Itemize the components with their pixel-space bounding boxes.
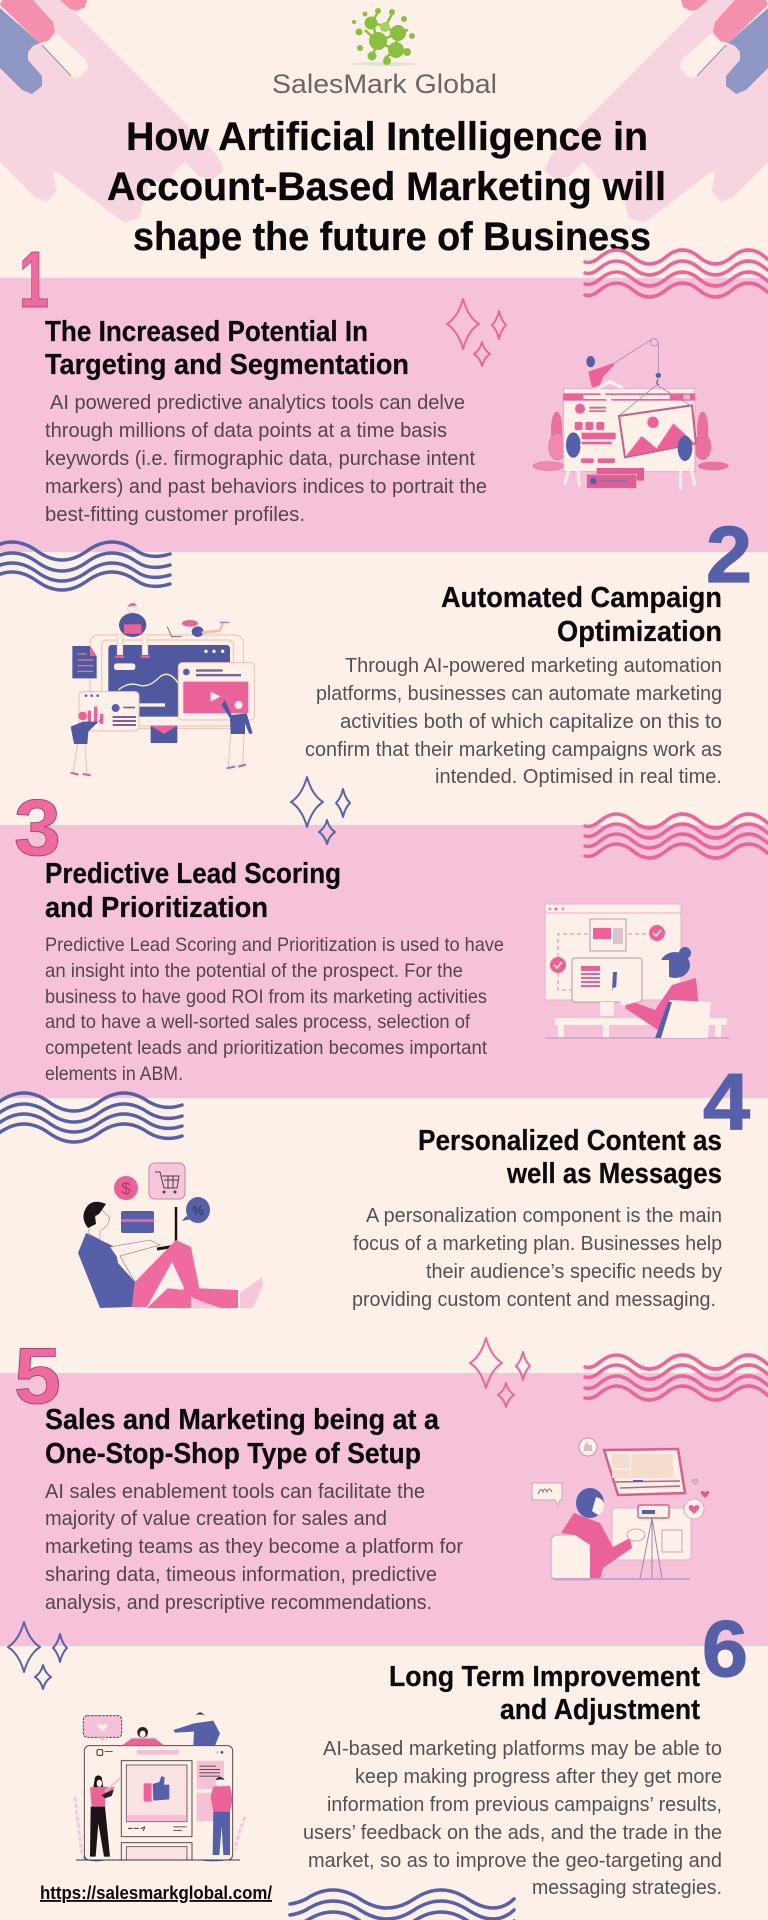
decorative corner stripes: top left bbox=[0, 0, 222, 221]
wave decoration blue bbox=[290, 1890, 514, 1920]
heading: well as Messages bbox=[506, 1158, 722, 1190]
heading: The Increased Potential In bbox=[45, 316, 368, 348]
body text: AI-based marketing platforms may be able to bbox=[323, 1737, 722, 1760]
body text: keep making progress after they get more bbox=[355, 1765, 722, 1788]
body text: their audience’s specific needs by bbox=[426, 1260, 723, 1283]
heading bbox=[441, 582, 722, 648]
panel: section 2 automated campaign optimization bbox=[0, 510, 752, 788]
wave decoration pink bbox=[585, 250, 768, 297]
heading bbox=[45, 858, 341, 924]
body text: intended. Optimised in real time. bbox=[435, 765, 722, 788]
body text: market, so as to improve the geo-targeting and bbox=[308, 1849, 722, 1872]
body text: sharing data, timeous information, predictive bbox=[45, 1563, 437, 1586]
panel: section 3 predictive lead scoring bbox=[0, 777, 768, 1098]
number 2: 2 bbox=[706, 510, 752, 599]
body text: information from previous campaigns’ results, bbox=[327, 1793, 722, 1816]
body text: majority of value creation for sales and bbox=[45, 1507, 387, 1530]
heading bbox=[45, 316, 409, 381]
body text bbox=[352, 1204, 723, 1311]
number 5: 5 bbox=[14, 1331, 61, 1420]
illustration: social media post with like and people bbox=[75, 1712, 245, 1861]
body text: AI sales enablement tools can facilitate the bbox=[45, 1480, 425, 1503]
illustration: people around dashboard screen bbox=[71, 603, 254, 775]
sparkle stars bbox=[470, 1338, 530, 1407]
panel: section 6 long term improvement bbox=[8, 1604, 748, 1920]
body text: business to have good ROI from its marketing activities bbox=[45, 986, 487, 1008]
heading bbox=[389, 1661, 700, 1726]
body text: an insight into the potential of the prospect. For the bbox=[45, 960, 463, 982]
illustration: woman at desk with workflow window bbox=[545, 904, 729, 1038]
heading: Targeting and Segmentation bbox=[45, 349, 409, 381]
body text: elements in ABM. bbox=[45, 1063, 183, 1085]
panel: section 5 sales and marketing setup bbox=[0, 1331, 768, 1646]
wave decoration blue bbox=[0, 542, 170, 590]
body text: keywords (i.e. firmographic data, purchase intent bbox=[45, 447, 475, 470]
heading: Long Term Improvement bbox=[389, 1661, 700, 1693]
body text: through millions of data points at a time basis bbox=[45, 419, 447, 442]
body text: platforms, businesses can automate marketing bbox=[316, 682, 722, 705]
illustration: man with laptop sitting, shopping icons: % bbox=[192, 1203, 204, 1218]
heading: Automated Campaign bbox=[441, 582, 722, 614]
sparkle stars bbox=[8, 1622, 67, 1689]
illustration: man with laptop sitting, shopping icons: $ bbox=[121, 1179, 131, 1198]
illustration: website with people fishing an image bbox=[533, 339, 729, 488]
body text: and to have a well-sorted sales process, selection of bbox=[45, 1011, 471, 1033]
body text bbox=[303, 1737, 722, 1899]
title: Account-Based Marketing will bbox=[107, 165, 666, 209]
body text: users’ feedback on the ads, and the trade in the bbox=[303, 1821, 722, 1844]
wave decoration blue bbox=[0, 1093, 182, 1142]
heading: Personalized Content as bbox=[418, 1125, 722, 1157]
title bbox=[107, 115, 666, 259]
number 3: 3 bbox=[14, 783, 61, 872]
body text bbox=[45, 934, 504, 1085]
body text bbox=[305, 654, 722, 788]
body text: messaging strategies. bbox=[532, 1876, 722, 1899]
heading: and Adjustment bbox=[500, 1694, 700, 1726]
number 6: 6 bbox=[702, 1604, 748, 1693]
icon: green network globe bbox=[352, 8, 416, 66]
heading: Sales and Marketing being at a bbox=[45, 1404, 440, 1436]
body text: focus of a marketing plan. Businesses help bbox=[353, 1232, 722, 1255]
body text bbox=[45, 391, 487, 526]
body text: activities both of which capitalize on this to bbox=[340, 710, 722, 733]
body text: analysis, and prescriptive recommendations. bbox=[45, 1591, 432, 1614]
logo wordmark: SalesMark Global bbox=[272, 69, 497, 99]
illustration: man with laptop sitting, shopping icons bbox=[78, 1163, 263, 1308]
body text: Predictive Lead Scoring and Prioritization is used to have bbox=[45, 934, 504, 956]
heading: Predictive Lead Scoring bbox=[45, 858, 341, 890]
number 1: 1 bbox=[19, 235, 49, 324]
body text: marketing teams as they become a platform for bbox=[45, 1535, 463, 1558]
decorative corner stripes: top right bbox=[546, 0, 768, 221]
wave decoration pink bbox=[585, 1355, 768, 1400]
link: website url: https://salesmarkglobal.com/ bbox=[40, 1882, 272, 1903]
logo: SalesMark Global bbox=[272, 8, 497, 99]
body text: A personalization component is the main bbox=[366, 1204, 722, 1227]
heading: Optimization bbox=[557, 616, 722, 648]
sparkle stars bbox=[291, 777, 350, 844]
heading: One-Stop-Shop Type of Setup bbox=[45, 1438, 421, 1470]
body text: confirm that their marketing campaigns work as bbox=[305, 738, 722, 761]
body text: competent leads and prioritization becomes important bbox=[45, 1037, 488, 1059]
body text bbox=[45, 1480, 463, 1614]
body text: best-fitting customer profiles. bbox=[45, 503, 305, 526]
wave decoration pink bbox=[585, 814, 768, 858]
body text: Through AI-powered marketing automation bbox=[345, 654, 722, 677]
body text: AI powered predictive analytics tools can delve bbox=[50, 391, 465, 414]
panel: section 4 personalized content bbox=[0, 1057, 751, 1311]
panel: section 1 targeting and segmentation bbox=[0, 235, 768, 552]
sparkle stars bbox=[447, 299, 506, 366]
heading: and Prioritization bbox=[45, 892, 268, 924]
title: shape the future of Business bbox=[133, 215, 651, 259]
number 4: 4 bbox=[703, 1057, 751, 1146]
body text: providing custom content and messaging. bbox=[352, 1288, 716, 1311]
body text: markers) and past behaviors indices to portrait the bbox=[45, 475, 487, 498]
heading bbox=[45, 1404, 440, 1470]
title: How Artificial Intelligence in bbox=[126, 115, 648, 159]
heading bbox=[418, 1125, 722, 1190]
illustration: woman recording video bbox=[532, 1438, 709, 1580]
